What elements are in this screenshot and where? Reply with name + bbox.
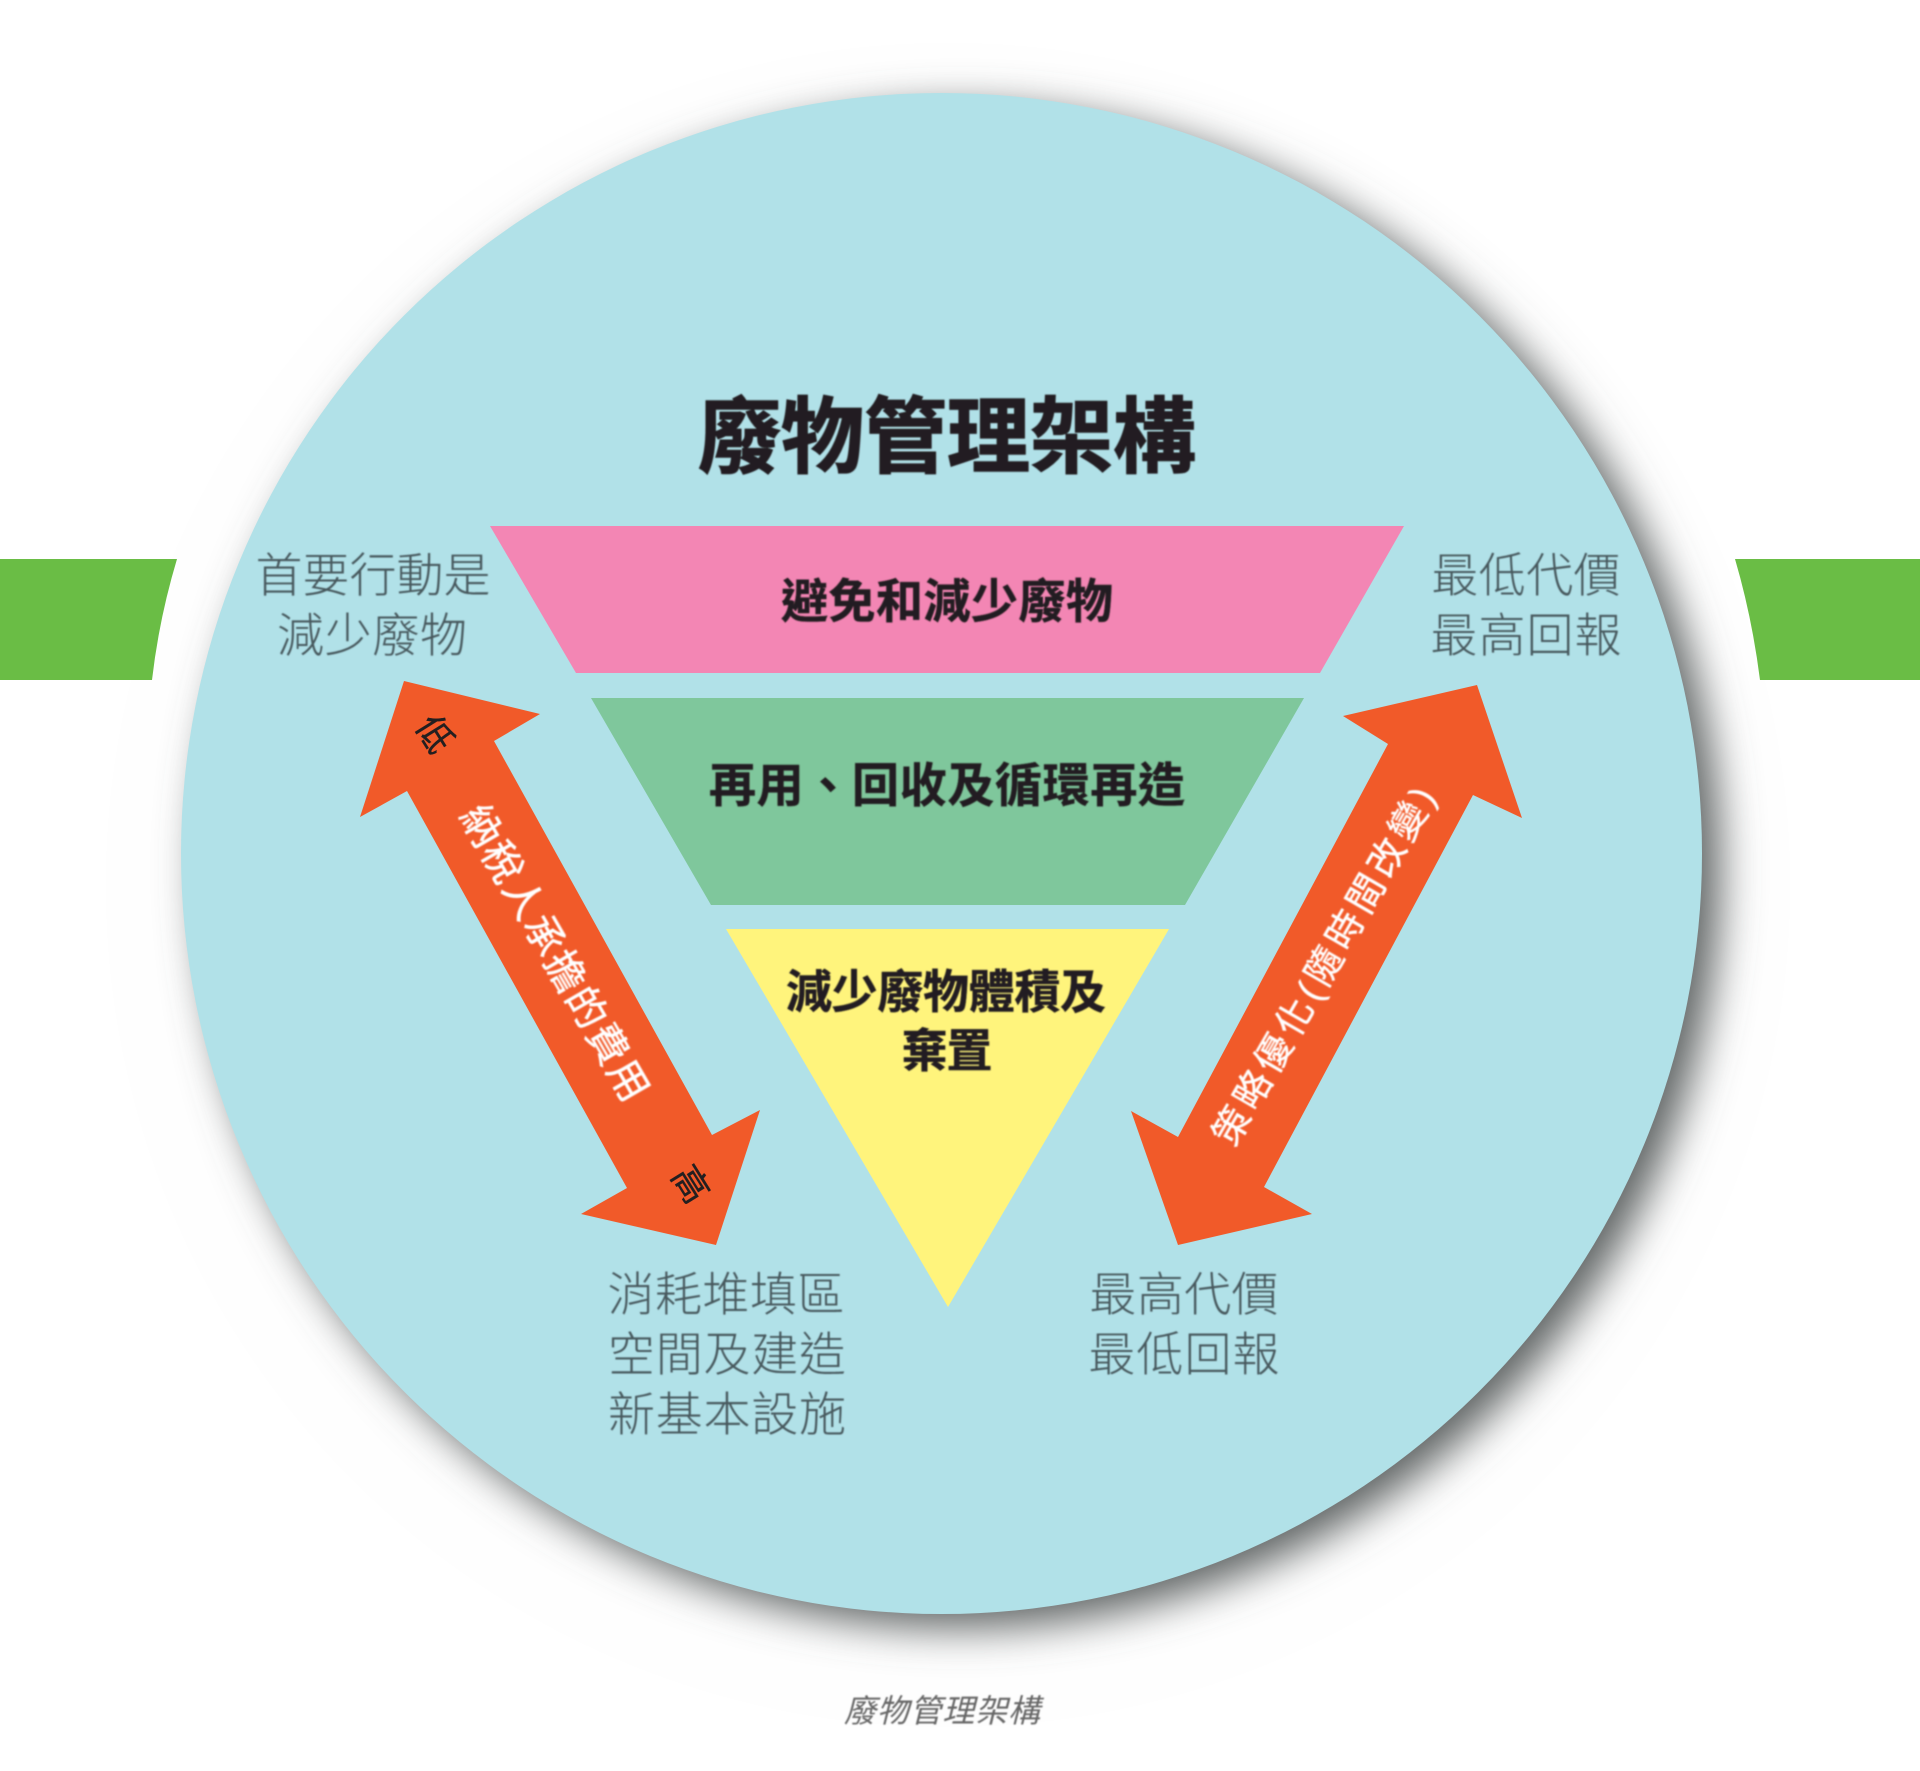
tier text: 棄置	[902, 1025, 992, 1077]
label: bottom left: 空間及建造	[608, 1328, 846, 1381]
label: top left	[256, 549, 490, 662]
low marker: 低	[408, 708, 462, 760]
label: top left: 首要行動是	[256, 549, 490, 602]
label: top right: 最高回報	[1430, 609, 1622, 662]
right green band	[1735, 559, 1920, 680]
title: 廢物管理架構	[698, 391, 1196, 484]
label: bottom right	[1088, 1268, 1280, 1381]
high marker: 高	[664, 1158, 718, 1210]
arrow: strategy optimisation	[1131, 685, 1522, 1245]
caption: 廢物管理架構	[844, 1693, 1045, 1729]
label: bottom left: 新基本設施	[608, 1388, 846, 1441]
tier text: 減少廢物體積及	[786, 966, 1106, 1018]
label: top right: 最低代價	[1432, 549, 1620, 602]
label: bottom right: 最低回報	[1088, 1328, 1280, 1381]
pyramid tier: reuse, recovery and recycling	[591, 698, 1304, 905]
arrow text: 策略優化(隨時間改變)	[1205, 780, 1444, 1152]
arrow text: 納稅人承擔的費用	[452, 798, 657, 1109]
pyramid tier: bulk reduction and disposal	[726, 929, 1169, 1307]
label: top left: 減少廢物	[277, 609, 467, 662]
label: bottom left	[608, 1268, 846, 1441]
left green band	[0, 559, 177, 680]
label: bottom left: 消耗堆填區	[608, 1268, 844, 1321]
pyramid tier: reuse, recovery and recycling: 再用、回收及循環再造	[709, 759, 1185, 812]
label: bottom right: 最高代價	[1090, 1268, 1278, 1321]
pyramid tier: avoid and reduce waste: 避免和減少廢物	[781, 575, 1113, 628]
circle panel with shadow	[181, 93, 1720, 1628]
arrow: taxpayer cost	[360, 681, 760, 1245]
label: top right	[1430, 549, 1622, 662]
pyramid tier: avoid and reduce waste	[490, 526, 1404, 673]
tier text	[786, 966, 1106, 1077]
